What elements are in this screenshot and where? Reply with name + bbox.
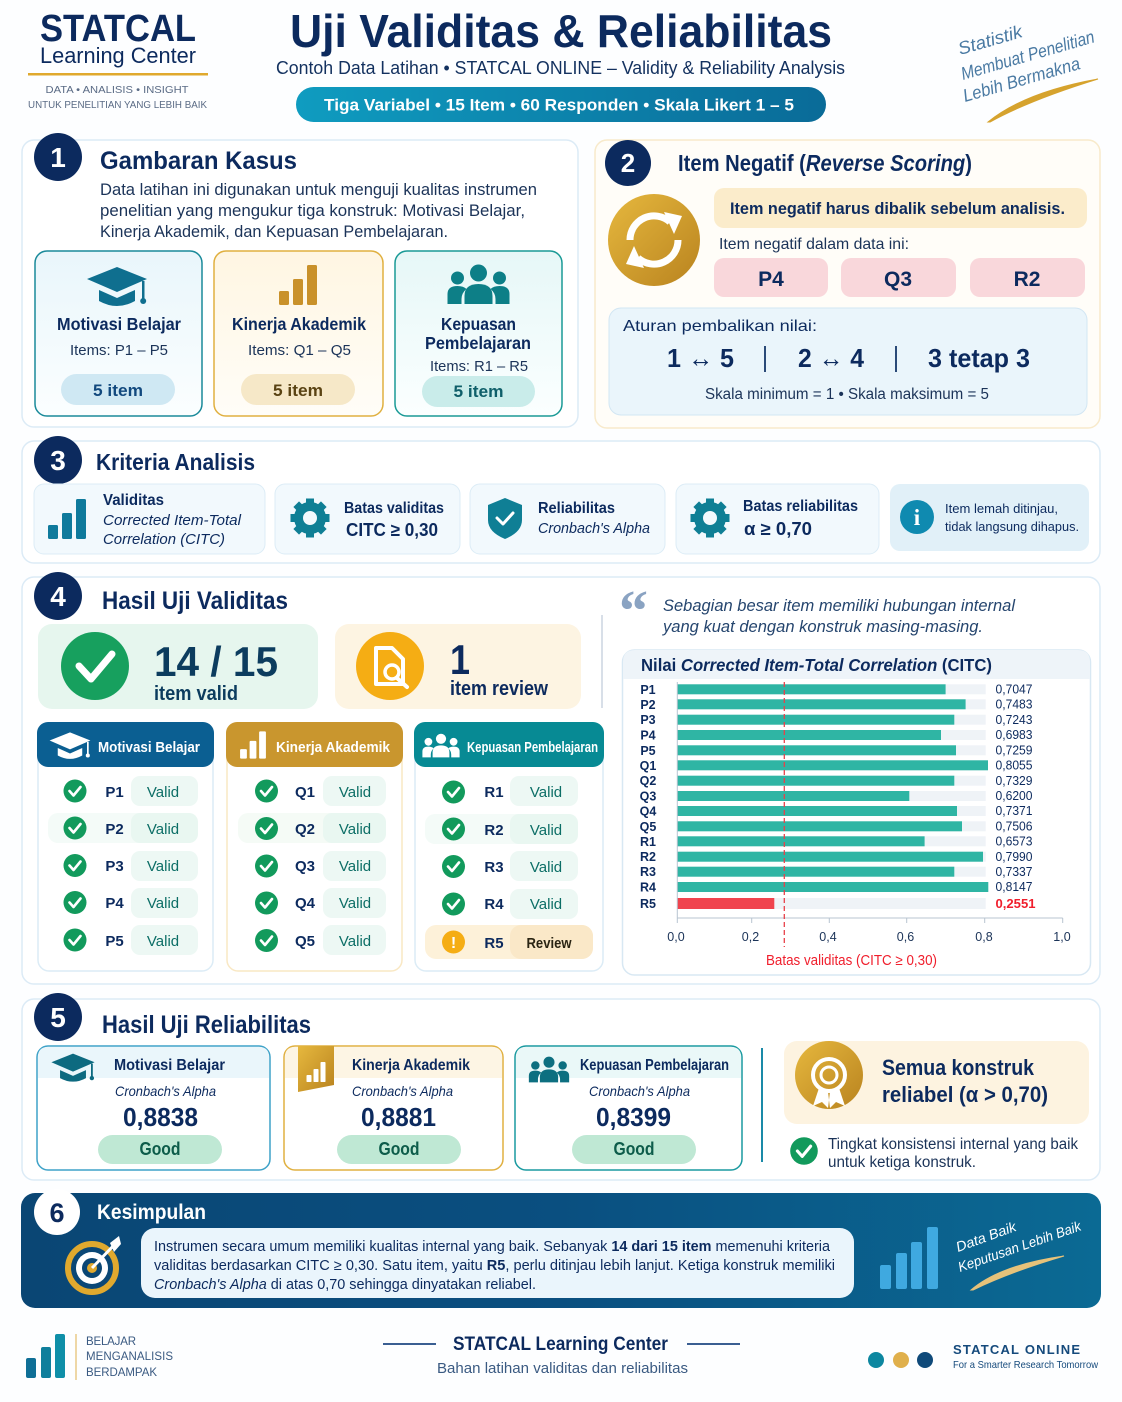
threshold label: Batas validitas (CITC ≥ 0,30)	[766, 953, 937, 969]
table: kepuasan pembelajaran: Valid	[530, 822, 562, 839]
item labels: Q1	[640, 759, 656, 773]
card: kepuasan pembelajaran	[395, 251, 562, 416]
value labels: 0,8147	[996, 880, 1033, 894]
item labels: P5	[640, 744, 656, 758]
badge 3	[34, 436, 82, 484]
table: motivasi belajar: P4	[105, 895, 124, 912]
reliability card: motivasi belajar: Good	[140, 1139, 180, 1159]
criterion: validitas	[34, 484, 265, 554]
icon: rising bars	[880, 1227, 938, 1289]
header logo: Learning Center	[40, 43, 196, 68]
table: motivasi belajar: P5	[105, 933, 124, 950]
header logo: DATA • ANALISIS • INSIGHT	[46, 84, 189, 96]
quote: “	[619, 578, 648, 643]
value labels: 0,7047	[996, 682, 1033, 696]
badge 5	[34, 993, 82, 1041]
item labels: R3	[640, 865, 656, 879]
card: kinerja akademik: Items: Q1 – Q5	[248, 342, 351, 359]
reliability verdict: reliabel (α > 0,70)	[882, 1082, 1048, 1107]
subtitle: Contoh Data Latihan • STATCAL ONLINE – Validity & Reliability Analysis	[276, 58, 845, 78]
value labels	[996, 682, 1036, 911]
table: kinerja akademik	[226, 722, 403, 971]
axis labels: 0,8	[975, 930, 993, 944]
chart title: Nilai Corrected Item-Total Correlation (CITC)	[641, 655, 992, 675]
description: Kinerja Akademik, dan Kepuasan Pembelajaran.	[100, 222, 448, 241]
table: kinerja akademik: Q3	[295, 858, 315, 875]
card: motivasi belajar	[35, 251, 202, 416]
table: kepuasan pembelajaran: !	[451, 935, 456, 952]
footer left	[26, 1334, 173, 1380]
table: kinerja akademik: Valid	[339, 858, 371, 875]
criterion: batas reliabilitas: α ≥ 0,70	[744, 519, 812, 539]
card: kinerja akademik	[214, 251, 383, 416]
reliability card: kinerja akademik: Kinerja Akademik	[352, 1057, 470, 1074]
criterion: reliabilitas	[470, 484, 665, 554]
item labels: P1	[640, 683, 656, 697]
consistency note: untuk ketiga konstruk.	[828, 1154, 976, 1171]
criterion: reliabilitas: Reliabilitas	[538, 500, 615, 517]
badge 3: 3	[50, 445, 66, 476]
badge 6	[34, 1189, 80, 1235]
badge 6: 6	[49, 1198, 65, 1228]
table: motivasi belajar: Motivasi Belajar	[98, 739, 200, 756]
panel 2: item negatif	[595, 140, 1100, 428]
table: kinerja akademik: Q1	[295, 784, 315, 801]
table: kinerja akademik: Valid	[339, 933, 371, 950]
description: penelitian yang mengukur tiga konstruk: Motivasi Belajar,	[100, 201, 525, 220]
handwritten note	[956, 21, 1098, 122]
stat: item valid	[38, 624, 318, 709]
heading: Hasil Uji Validitas	[102, 587, 288, 615]
table: motivasi belajar: Valid	[147, 784, 179, 801]
chart: CITC bar chart	[622, 650, 1090, 975]
summary pill	[296, 87, 826, 122]
footer right: STATCAL ONLINE	[953, 1342, 1080, 1357]
badge 2: 2	[621, 148, 635, 178]
badge 1	[34, 133, 82, 181]
value labels: 0,7990	[996, 850, 1033, 864]
item labels: P4	[640, 728, 656, 742]
footer right: For a Smarter Research Tomorrow	[953, 1359, 1098, 1371]
header logo	[28, 8, 208, 111]
table: kepuasan pembelajaran: Kepuasan Pembelajaran	[467, 739, 598, 756]
icon: reverse arrows	[608, 194, 700, 286]
badge 2	[605, 140, 651, 186]
axis labels: 1,0	[1053, 930, 1071, 944]
table: kepuasan pembelajaran: Valid	[530, 784, 562, 801]
footer left: BERDAMPAK	[86, 1367, 157, 1379]
card: motivasi belajar: Items: P1 – P5	[70, 342, 168, 359]
negative item chips	[714, 258, 1085, 297]
value labels: 0,7483	[996, 698, 1033, 712]
info note	[890, 484, 1089, 551]
footer left: BELAJAR	[86, 1336, 136, 1348]
stat: item valid: 14 / 15	[154, 638, 278, 685]
axis labels: 0,0	[667, 930, 685, 944]
reliability card: kinerja akademik: Good	[378, 1139, 420, 1159]
description	[100, 180, 537, 241]
item labels: R5	[640, 897, 656, 911]
reliability verdict	[784, 1041, 1089, 1124]
panel 6: kesimpulan	[21, 1189, 1101, 1308]
value labels: 0,6983	[996, 728, 1033, 742]
badge 5: 5	[50, 1002, 66, 1033]
handwritten note: Statistik	[956, 21, 1026, 59]
icon: target	[68, 1236, 121, 1292]
badge 4	[34, 572, 82, 620]
stat: item review	[335, 624, 581, 709]
axis labels: 0,4	[819, 930, 837, 944]
card: motivasi belajar: Motivasi Belajar	[57, 314, 181, 334]
reversal rule box: Aturan pembalikan nilai:	[623, 318, 817, 335]
info note: Item lemah ditinjau,	[945, 501, 1058, 516]
criterion: batas validitas	[275, 484, 460, 554]
card: kepuasan pembelajaran: Pembelajaran	[425, 333, 531, 353]
table: motivasi belajar: P2	[105, 821, 124, 838]
item labels: P2	[640, 698, 656, 712]
reversal rule box: 2 ↔ 4	[798, 343, 865, 373]
item labels: R4	[640, 880, 656, 894]
criterion: reliabilitas: Cronbach's Alpha	[538, 520, 650, 537]
table: motivasi belajar: Valid	[147, 933, 179, 950]
card: kinerja akademik: Kinerja Akademik	[232, 314, 366, 334]
bar tracks	[677, 684, 986, 909]
axes	[677, 682, 1063, 923]
reliability card: kepuasan pembelajaran: Cronbach's Alpha	[589, 1083, 690, 1099]
info note: i	[914, 505, 921, 530]
table: motivasi belajar	[37, 722, 214, 971]
value labels: 0,7243	[996, 713, 1033, 727]
description: Data latihan ini digunakan untuk menguji kualitas instrumen	[100, 180, 537, 199]
table: motivasi belajar: Valid	[147, 821, 179, 838]
panel 5: hasil uji reliabilitas	[22, 993, 1100, 1180]
quote: yang kuat dengan konstruk masing-masing.	[662, 617, 983, 636]
criterion: batas validitas: Batas validitas	[344, 500, 444, 517]
title: Uji Validitas & Reliabilitas	[290, 5, 832, 57]
handwritten note: Data Baik	[954, 1218, 1019, 1255]
heading: Kriteria Analisis	[96, 449, 255, 475]
table: motivasi belajar: P3	[105, 858, 124, 875]
card: kepuasan pembelajaran: Items: R1 – R5	[430, 358, 528, 375]
reversal rule box: 1 ↔ 5	[667, 343, 734, 373]
badge 4: 4	[50, 581, 66, 612]
reliability card: motivasi belajar: Motivasi Belajar	[114, 1057, 225, 1074]
heading: Gambaran Kasus	[100, 147, 297, 175]
panel 1: gambaran kasus	[22, 133, 578, 427]
reliability card: motivasi belajar	[37, 1046, 270, 1170]
item labels: Q5	[640, 820, 656, 834]
table: kinerja akademik: Valid	[339, 895, 371, 912]
header logo: UNTUK PENELITIAN YANG LEBIH BAIK	[28, 99, 207, 111]
card: motivasi belajar: 5 item	[93, 381, 143, 400]
heading: Item Negatif (Reverse Scoring)	[678, 150, 972, 176]
negative item chips: P4	[758, 268, 784, 291]
table: motivasi belajar: Valid	[147, 895, 179, 912]
item labels: R1	[640, 835, 656, 849]
table: kinerja akademik: Q4	[295, 895, 316, 912]
threshold line	[783, 682, 785, 947]
table: kinerja akademik: Q2	[295, 821, 315, 838]
criterion: batas reliabilitas: Batas reliabilitas	[743, 498, 858, 515]
reliability card: kepuasan pembelajaran: Kepuasan Pembelajaran	[580, 1057, 729, 1074]
conclusion text: Cronbach's Alpha di atas 0,70 sehingga dinyatakan reliabel.	[154, 1277, 536, 1293]
footer right	[868, 1342, 1098, 1371]
value labels: 0,7337	[996, 865, 1033, 879]
reversal rule box: 3 tetap 3	[928, 343, 1030, 373]
reliability card: kinerja akademik: 0,8881	[361, 1102, 436, 1132]
table: kinerja akademik: Valid	[339, 784, 371, 801]
table: kepuasan pembelajaran: Valid	[530, 859, 562, 876]
info note: tidak langsung dihapus.	[945, 519, 1079, 534]
axis labels	[667, 930, 1071, 944]
reliability card: motivasi belajar: 0,8838	[123, 1102, 198, 1132]
criterion: validitas: Validitas	[103, 492, 164, 509]
item labels	[640, 683, 656, 911]
table: kepuasan pembelajaran: R2	[484, 822, 504, 839]
reversal rule box: Skala minimum = 1 • Skala maksimum = 5	[705, 386, 989, 403]
axis labels: 0,6	[897, 930, 914, 944]
reliability card: kepuasan pembelajaran: Good	[614, 1139, 654, 1159]
card: kepuasan pembelajaran: 5 item	[454, 382, 504, 401]
value labels: 0,7259	[996, 744, 1033, 758]
consistency note	[790, 1136, 1078, 1171]
handwritten note: Keputusan Lebih Baik	[956, 1217, 1084, 1275]
bars	[677, 684, 988, 909]
conclusion text: Instrumen secara umum memiliki kualitas internal yang baik. Sebanyak 14 dari 15 item memenuhi kriteria	[154, 1239, 831, 1255]
summary pill: Tiga Variabel • 15 Item • 60 Responden • Skala Likert 1 – 5	[324, 96, 794, 114]
table: kepuasan pembelajaran: Valid	[530, 896, 562, 913]
value labels: 0,8055	[996, 758, 1033, 772]
negative item chips: R2	[1014, 268, 1040, 291]
value labels: 0,7506	[996, 820, 1033, 834]
reversal rule box	[609, 308, 1087, 415]
panel 3: kriteria analisis	[22, 436, 1100, 563]
table: motivasi belajar: P1	[105, 784, 124, 801]
table: kepuasan pembelajaran	[414, 722, 604, 971]
conclusion text: validitas berdasarkan CITC ≥ 0,30. Satu item, yaitu R5, perlu ditinjau lebih lanjut. Ketiga konstruk memiliki	[154, 1258, 835, 1274]
table: kepuasan pembelajaran: R5	[484, 935, 504, 952]
quote	[619, 578, 1016, 643]
reliability verdict: Semua konstruk	[882, 1055, 1035, 1080]
table: kepuasan pembelajaran: R4	[484, 896, 504, 913]
handwritten note: Membuat Penelitian	[959, 27, 1097, 84]
handwritten note: Lebih Bermakna	[961, 53, 1082, 106]
table: kinerja akademik: Kinerja Akademik	[276, 739, 391, 756]
item labels: P3	[640, 713, 656, 727]
stat: item review: 1	[450, 636, 470, 683]
badge 1: 1	[50, 142, 66, 173]
footer center	[383, 1333, 740, 1377]
criterion: batas reliabilitas	[676, 484, 879, 554]
footer center: Bahan latihan validitas dan reliabilitas	[437, 1360, 688, 1377]
item labels: R2	[640, 850, 656, 864]
table: kinerja akademik: Valid	[339, 821, 371, 838]
card: kinerja akademik: 5 item	[273, 381, 323, 400]
reliability card: kinerja akademik: Cronbach's Alpha	[352, 1083, 453, 1099]
footer center: STATCAL Learning Center	[453, 1333, 668, 1355]
value labels: 0,6573	[996, 834, 1033, 848]
value labels: 0,7371	[996, 804, 1033, 818]
stat: item valid: item valid	[154, 683, 238, 705]
criterion: batas validitas: CITC ≥ 0,30	[346, 520, 438, 540]
heading: Kesimpulan	[97, 1201, 206, 1224]
reliability card: kinerja akademik	[284, 1046, 503, 1170]
negative item chips: Q3	[884, 268, 912, 291]
value labels: 0,2551	[996, 897, 1036, 911]
quote: Sebagian besar item memiliki hubungan internal	[663, 596, 1016, 615]
value labels: 0,6200	[996, 789, 1033, 803]
axis labels: 0,2	[742, 930, 759, 944]
panel 4: hasil uji validitas	[22, 572, 1100, 984]
heading: Hasil Uji Reliabilitas	[102, 1011, 311, 1039]
reliability card: kepuasan pembelajaran: 0,8399	[596, 1102, 671, 1132]
label: item negatif: Item negatif dalam data ini:	[719, 236, 909, 253]
card: kepuasan pembelajaran: Kepuasan	[441, 314, 516, 334]
header logo: STATCAL	[40, 8, 196, 50]
table: kepuasan pembelajaran: Review	[526, 935, 572, 952]
table: kepuasan pembelajaran: R1	[484, 784, 504, 801]
item labels: Q4	[640, 804, 656, 818]
callout: Item negatif harus dibalik sebelum analisis.	[730, 199, 1065, 218]
item labels: Q3	[640, 790, 656, 804]
callout	[714, 188, 1087, 228]
conclusion text	[141, 1228, 854, 1298]
footer left: MENGANALISIS	[86, 1351, 173, 1363]
reliability card: motivasi belajar: Cronbach's Alpha	[115, 1083, 216, 1099]
criterion: validitas: Corrected Item-Total	[103, 512, 242, 529]
table: kepuasan pembelajaran: R3	[484, 859, 504, 876]
criterion: validitas: Correlation (CITC)	[103, 531, 225, 548]
stat: item review: item review	[450, 678, 548, 700]
table: motivasi belajar: Valid	[147, 858, 179, 875]
reliability card: kepuasan pembelajaran	[515, 1046, 742, 1170]
value labels: 0,7329	[996, 774, 1033, 788]
consistency note: Tingkat konsistensi internal yang baik	[828, 1136, 1078, 1153]
item labels: Q2	[640, 774, 656, 788]
table: kinerja akademik: Q5	[295, 933, 315, 950]
